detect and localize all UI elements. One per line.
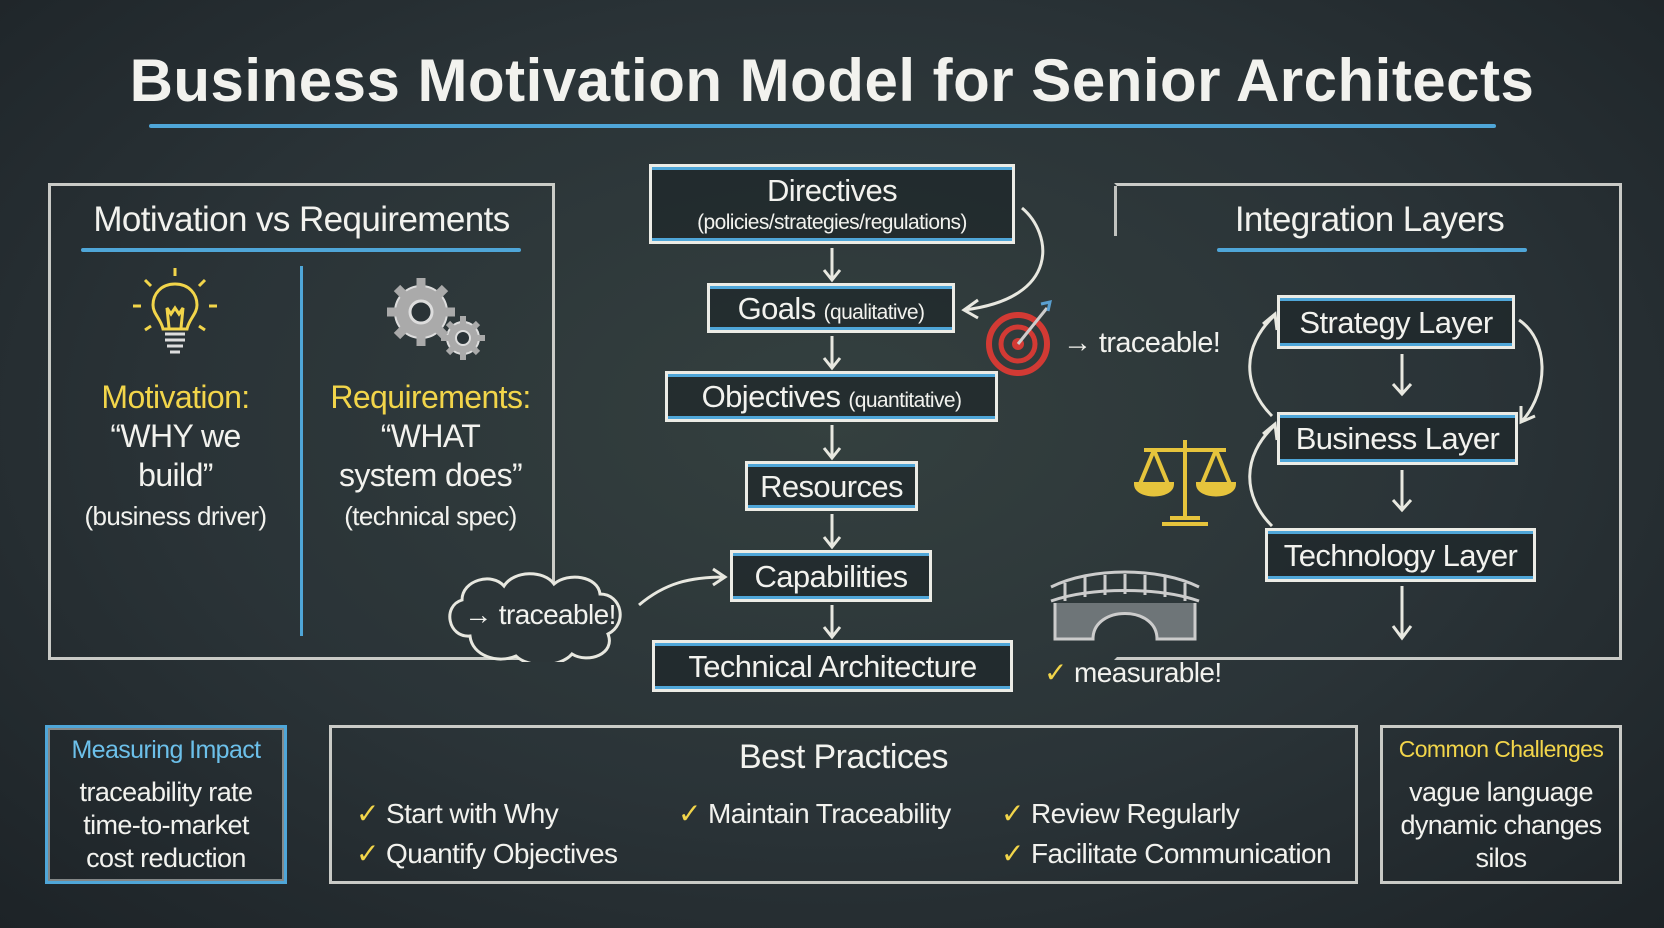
box: technology layer: Technology Layer: [1284, 538, 1517, 572]
title: Business Motivation Model for Senior Architects: [130, 47, 1534, 114]
text: motivation: build”: [138, 457, 213, 493]
box: business layer: Business Layer: [1296, 421, 1499, 456]
label: measurable: ✓ measurable!: [1044, 657, 1222, 688]
icon: light bulb: [133, 268, 217, 354]
icon: gears: [387, 278, 485, 360]
box: directives: Directives: [767, 173, 897, 208]
label: traceable target: → traceable!: [1063, 327, 1220, 359]
heading: motivation vs requirements: Motivation vs Requirements: [93, 200, 510, 239]
heading: best practices: Best Practices: [739, 738, 948, 776]
panel: measuring impact: traceability rate: [80, 777, 252, 807]
panel: measuring impact: [45, 725, 287, 884]
icon: scales: [1134, 440, 1236, 526]
panel: common challenges: vague language: [1409, 777, 1593, 807]
flow: directives chain: [649, 164, 1044, 692]
arrows: layers: [1248, 311, 1544, 640]
panel: measuring impact: Measuring Impact: [71, 736, 261, 764]
text: motivation: Motivation:: [101, 379, 250, 415]
panel: common challenges: Common Challenges: [1399, 736, 1603, 762]
box: resources: [745, 461, 918, 511]
box: business layer: [1277, 412, 1518, 465]
text: motivation: (business driver): [84, 501, 266, 531]
text: requirements: “WHAT: [381, 418, 480, 454]
box: technical architecture: [652, 640, 1013, 692]
panel: common challenges: [1380, 725, 1622, 884]
box: directives: (policies/strategies/regulations): [697, 211, 967, 234]
text: requirements: [330, 379, 531, 531]
box: objectives: [665, 371, 998, 422]
panel: best practices: ✓ Facilitate Communication: [1001, 838, 1331, 869]
heading: integration layers: Integration Layers: [1235, 200, 1504, 239]
panel: best practices: ✓ Review Regularly: [1001, 798, 1239, 829]
panel: best practices: [329, 725, 1358, 884]
cloud: traceable: → traceable!: [464, 599, 616, 630]
text: motivation: “WHY we: [110, 418, 241, 454]
panel: measuring impact: cost reduction: [86, 843, 246, 873]
panel: common challenges: dynamic changes: [1400, 810, 1602, 840]
box: capabilities: Capabilities: [754, 558, 908, 594]
box: capabilities: [730, 550, 932, 602]
box: objectives: Objectives (quantitative): [702, 379, 961, 414]
panel: best practices: ✓ Maintain Traceability: [678, 798, 951, 829]
list: practices: ✓ Quantify Objectives: [356, 838, 617, 869]
box: resources: Resources: [760, 468, 903, 504]
panel: integration layers: [1114, 183, 1622, 660]
text: motivation: [84, 379, 266, 531]
text: requirements: system does”: [339, 457, 522, 493]
list: practices: [356, 798, 617, 869]
box: technology layer: [1265, 528, 1536, 582]
arrow: cloud to capabilities: [638, 568, 728, 606]
box: goals: Goals (qualitative): [738, 290, 924, 326]
panel: common challenges: silos: [1475, 843, 1526, 873]
box: goals: [707, 283, 955, 333]
arrows: down chain: [822, 206, 1044, 640]
list: practices: ✓ Start with Why: [356, 798, 558, 829]
text: requirements: Requirements:: [330, 379, 531, 415]
panel: motivation vs requirements: [48, 183, 555, 660]
cloud: traceable: [448, 572, 622, 662]
box: directives: [649, 164, 1015, 244]
icon: target with arrow: [986, 300, 1052, 376]
icon: bridge: [1050, 570, 1200, 640]
panel: measuring impact: time-to-market: [83, 810, 249, 840]
box: technical architecture: Technical Architecture: [688, 648, 977, 684]
box: strategy layer: [1277, 295, 1515, 349]
box: strategy layer: Strategy Layer: [1299, 304, 1493, 340]
text: requirements: (technical spec): [344, 501, 517, 531]
